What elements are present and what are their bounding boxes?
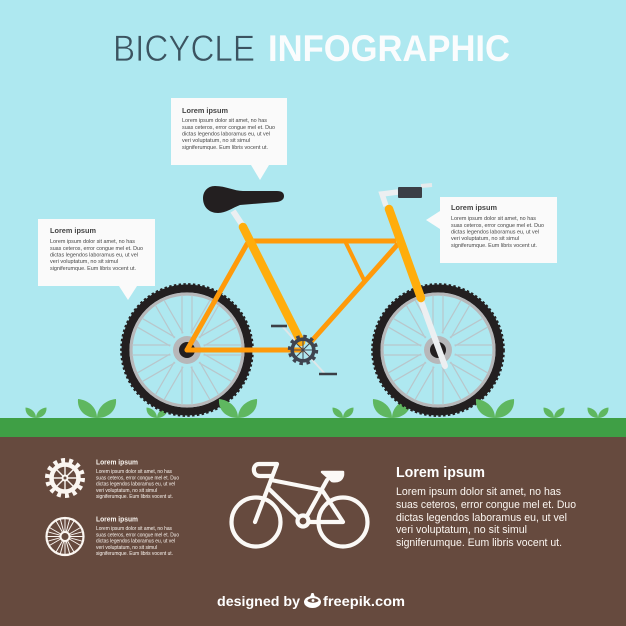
leaves in front of the wheels bbox=[219, 399, 514, 418]
title: BICYCLE bbox=[113, 28, 255, 69]
callout: right: veri voluptatum, no sit simul bbox=[451, 236, 519, 242]
callout: right: Lorem ipsum bbox=[451, 203, 497, 212]
seat post bbox=[233, 211, 243, 226]
icon: bicycle outline bbox=[232, 464, 368, 546]
text block: gear: Lorem ipsum dolor sit amet, no has bbox=[96, 469, 172, 475]
callout: left: veri voluptatum, no sit simul bbox=[50, 259, 118, 265]
callout: right: dictas legendos laboramus eu, ut vel bbox=[451, 230, 539, 236]
text block: wheel bbox=[96, 516, 179, 557]
text block: wheel: signiferumque. Eum libris vocent ut. bbox=[96, 551, 173, 557]
text block: wheel: dictas legendos laboramus eu, ut vel bbox=[96, 538, 175, 544]
title bbox=[113, 28, 510, 69]
text block: main: veri voluptatum, no sit simul bbox=[396, 524, 527, 536]
text block: gear: Lorem ipsum bbox=[96, 460, 138, 466]
callout: right: suas ceteros, error congue mel et. Duo bbox=[451, 223, 544, 229]
callout: top: Lorem ipsum bbox=[182, 106, 228, 115]
callout: right: Lorem ipsum dolor sit amet, no has bbox=[451, 216, 536, 222]
text block: wheel: Lorem ipsum bbox=[96, 516, 138, 524]
text block: wheel: suas ceteros, error congue mel et. Duo bbox=[96, 532, 179, 538]
seat tube and head tube bbox=[243, 209, 421, 342]
text block: main: suas ceteros, error congue mel et. Duo bbox=[396, 499, 576, 511]
callout: top: Lorem ipsum dolor sit amet, no has bbox=[182, 118, 267, 124]
callout: top: signiferumque. Eum libris vocent ut. bbox=[182, 145, 268, 151]
text block: gear bbox=[96, 460, 179, 500]
title: INFOGRAPHIC bbox=[268, 28, 510, 69]
text block: gear: veri voluptatum, no sit simul bbox=[96, 488, 157, 494]
text block: gear: signiferumque. Eum libris vocent ut. bbox=[96, 494, 173, 500]
handlebar bbox=[382, 185, 432, 206]
frame tubes bbox=[187, 241, 398, 350]
icon: freepik logo bbox=[304, 593, 321, 608]
callout: left bbox=[38, 219, 155, 300]
leaves behind the wheels bbox=[26, 399, 608, 418]
footer credit bbox=[217, 593, 405, 609]
ground panel bbox=[0, 437, 626, 626]
chainring gear bbox=[290, 336, 316, 364]
icon: gear bbox=[48, 460, 82, 496]
fork bbox=[420, 298, 445, 366]
callout: right: signiferumque. Eum libris vocent ut. bbox=[451, 243, 537, 249]
callout: top: veri voluptatum, no sit simul bbox=[182, 138, 250, 144]
text block: main: signiferumque. Eum libris vocent ut. bbox=[396, 537, 562, 549]
icon: wheel bbox=[46, 518, 84, 555]
text block: main bbox=[396, 465, 576, 549]
callout: left: Lorem ipsum dolor sit amet, no has bbox=[50, 239, 135, 245]
callout: left: suas ceteros, error congue mel et. Duo bbox=[50, 246, 143, 252]
footer credit: designed by bbox=[217, 593, 300, 609]
text block: main: Lorem ipsum bbox=[396, 465, 485, 481]
sky background bbox=[0, 0, 626, 418]
text block: gear: dictas legendos laboramus eu, ut vel bbox=[96, 482, 175, 488]
callout: left: dictas legendos laboramus eu, ut vel bbox=[50, 252, 138, 258]
footer credit: freepik.com bbox=[323, 593, 405, 609]
callout: top: dictas legendos laboramus eu, ut vel bbox=[182, 132, 270, 138]
callout: top bbox=[171, 98, 287, 180]
front wheel bbox=[372, 284, 504, 416]
bicycle bbox=[121, 185, 504, 416]
rear wheel bbox=[121, 284, 253, 416]
text block: gear: suas ceteros, error congue mel et. Duo bbox=[96, 476, 179, 482]
callout: left: Lorem ipsum bbox=[50, 226, 96, 235]
text block: wheel: veri voluptatum, no sit simul bbox=[96, 545, 157, 551]
text block: main: dictas legendos laboramus eu, ut vel bbox=[396, 512, 567, 524]
pedals and crank bbox=[271, 326, 337, 374]
callout: left: signiferumque. Eum libris vocent ut. bbox=[50, 266, 136, 272]
saddle bbox=[203, 186, 284, 213]
text block: main: Lorem ipsum dolor sit amet, no has bbox=[396, 486, 561, 498]
grass band bbox=[0, 418, 626, 437]
callout: right bbox=[426, 197, 557, 263]
callout: top: suas ceteros, error congue mel et. Duo bbox=[182, 125, 275, 131]
text block: wheel: Lorem ipsum dolor sit amet, no has bbox=[96, 526, 172, 532]
